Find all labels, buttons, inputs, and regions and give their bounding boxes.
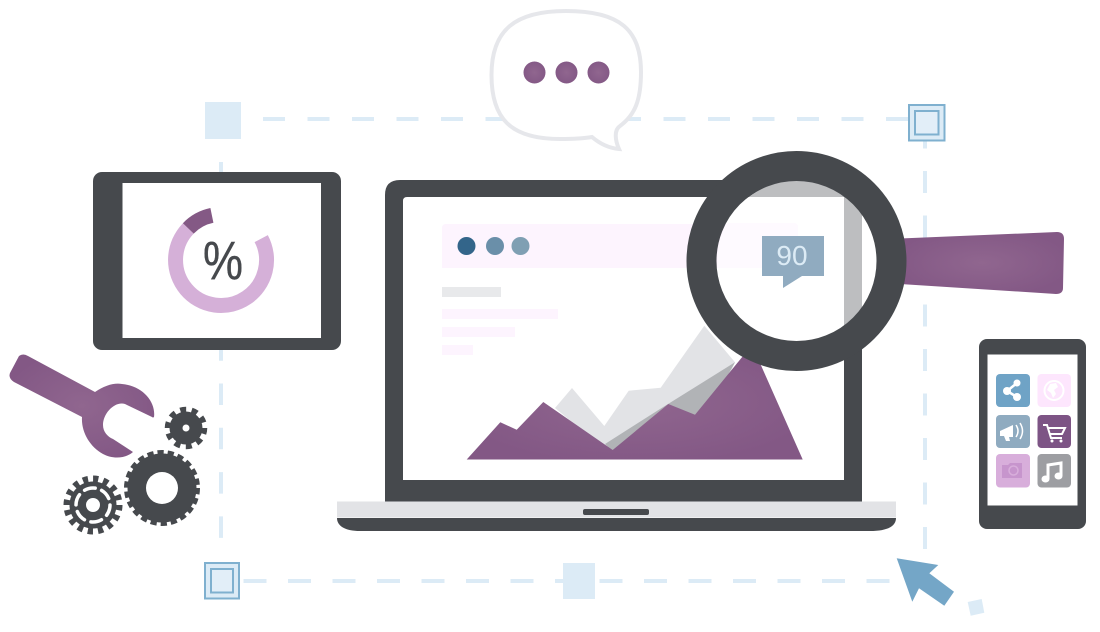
- laptop base: [337, 518, 896, 531]
- frame square: bottom left: [205, 563, 239, 598]
- tablet: [93, 172, 341, 350]
- magnifier: [700, 166, 900, 356]
- dashed frame: [221, 119, 925, 581]
- magnifier handle: [900, 232, 1064, 294]
- icon: megaphone: [996, 415, 1030, 448]
- icon: cart: [1038, 415, 1071, 448]
- speech bubble: [492, 11, 641, 149]
- text placeholder lines: [442, 287, 558, 355]
- icon: globe: [1038, 374, 1071, 407]
- frame square: bottom middle: [563, 563, 595, 599]
- arrow: cursor: [897, 558, 954, 606]
- phone: [979, 339, 1086, 529]
- icon: spoked gear: [67, 479, 119, 531]
- frame square: top right: [909, 105, 944, 140]
- magnifier ring: [702, 166, 892, 356]
- percent sign: %: [203, 231, 243, 291]
- header dots: [458, 237, 530, 255]
- bubble dots: [524, 62, 610, 84]
- screen header band: [442, 224, 760, 268]
- icon: music: [1038, 454, 1071, 488]
- callout: 90: 90: [776, 240, 808, 271]
- icon: wrench: [10, 354, 154, 458]
- frame square: top left: [205, 102, 241, 139]
- area chart: [467, 326, 803, 460]
- icon: small gear: [168, 410, 204, 446]
- small tilted square: [968, 599, 984, 616]
- callout: 90: [762, 236, 824, 288]
- icon: share: [996, 374, 1030, 407]
- icon: camera: [996, 454, 1030, 488]
- donut chart: [176, 215, 267, 305]
- laptop: [337, 180, 896, 531]
- icon: large gear: [126, 452, 198, 524]
- magnified screen: [749, 181, 862, 325]
